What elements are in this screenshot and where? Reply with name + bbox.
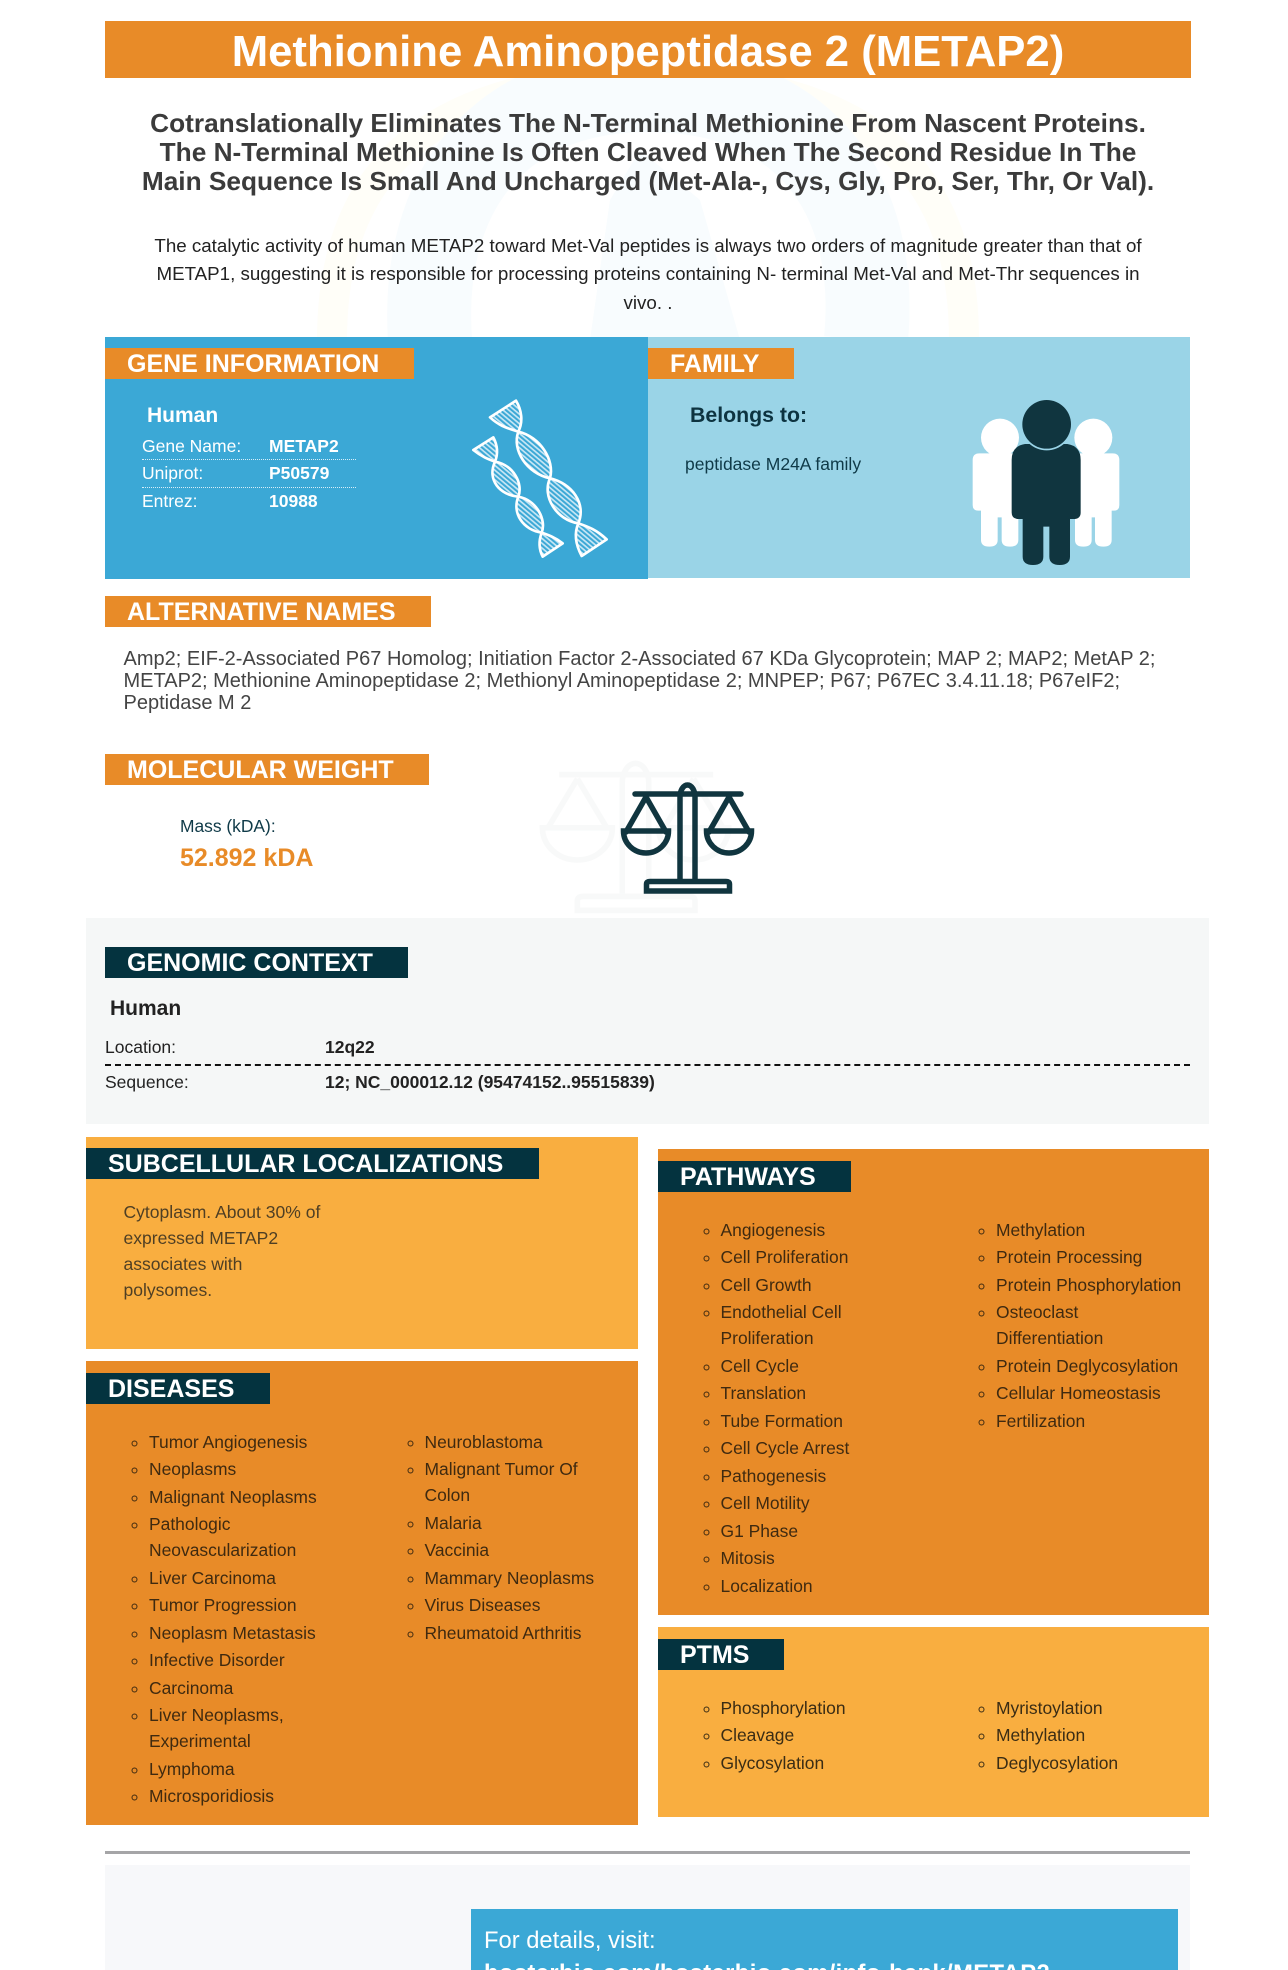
diseases list column 2: Mammary Neoplasms [424, 1568, 594, 1588]
panel: footer [105, 1865, 1190, 1970]
pathways list column 1: Cell Growth [720, 1274, 812, 1294]
panel: gene information [105, 337, 648, 579]
callout: details link: For details, visit: [484, 1926, 656, 1954]
pathways list column 1: Proliferation [720, 1328, 814, 1348]
ptms list column 2: Methylation [996, 1725, 1085, 1745]
entrez row [142, 490, 318, 510]
panel: genomic context: 12; NC_000012.12 (95474152..95515839) [325, 1072, 655, 1092]
panel: diseases [86, 1361, 638, 1825]
diseases list column 2 [408, 1432, 594, 1642]
subtitle: The N-Terminal Methionine Is Often Cleaved When The Second Residue In The [160, 137, 1136, 167]
uniprot row: P50579 [269, 463, 329, 483]
heading: pathways: PATHWAYS [680, 1162, 816, 1190]
alternative names text: Amp2; EIF-2-Associated P67 Homolog; Initiation Factor 2-Associated 67 KDa Glycoprotein; MAP 2; MAP2; MetAP 2; [124, 648, 1155, 670]
diseases list column 1: Experimental [149, 1731, 251, 1751]
uniprot row: Uniprot: [142, 463, 203, 483]
pathways list column 1: Pathogenesis [720, 1466, 826, 1486]
heading: diseases: DISEASES [108, 1375, 234, 1403]
entrez row: 10988 [269, 490, 318, 510]
pathways list column 2: Differentiation [996, 1328, 1103, 1348]
title [105, 21, 1191, 78]
pathways list column 2: Protein Phosphorylation [996, 1274, 1181, 1294]
species label: Human [110, 997, 181, 1020]
localization text: expressed METAP2 [124, 1228, 278, 1248]
localization text: polysomes. [124, 1280, 212, 1300]
gene name row [142, 436, 356, 460]
localization text: Cytoplasm. About 30% of [124, 1202, 320, 1222]
heading: diseases [86, 1373, 270, 1404]
subtitle: Cotranslationally Eliminates The N-Terminal Methionine From Nascent Proteins. [150, 108, 1146, 138]
pathways list column 2: Osteoclast [996, 1302, 1078, 1322]
pathways list column 2 [978, 1220, 1181, 1430]
diseases list column 1: Liver Carcinoma [149, 1568, 276, 1588]
heading: subcellular localizations: SUBCELLULAR LOCALIZATIONS [108, 1150, 503, 1178]
diseases list column 1: Lymphoma [149, 1758, 235, 1778]
ptms list column 1: Phosphorylation [720, 1698, 846, 1718]
diseases list column 1: Neoplasm Metastasis [149, 1622, 316, 1642]
pathways list column 1: Cell Motility [720, 1493, 810, 1513]
description [154, 234, 1142, 312]
diseases list column 2: Neuroblastoma [424, 1432, 543, 1452]
heading: molecular weight: MOLECULAR WEIGHT [127, 756, 394, 784]
heading: family: FAMILY [670, 350, 759, 378]
title: Methionine Aminopeptidase 2 (METAP2) [232, 27, 1064, 76]
species label: Human [147, 404, 218, 427]
panel: ptms [658, 1627, 1209, 1817]
diseases list column 1: Neoplasms [149, 1459, 236, 1479]
pathways list column 1: Cell Proliferation [720, 1247, 848, 1267]
belongs to label: Belongs to: [690, 403, 807, 427]
diseases list column 1: Tumor Progression [149, 1595, 297, 1615]
pathways list column 2: Methylation [996, 1220, 1085, 1240]
heading: pathways [658, 1160, 851, 1192]
sequence row: Sequence: [105, 1072, 189, 1092]
diseases list column 2: Colon [424, 1485, 470, 1505]
mass value: 52.892 kDA [180, 844, 313, 872]
heading: gene information: GENE INFORMATION [127, 350, 379, 378]
description: METAP1, suggesting it is responsible for processing proteins containing N- terminal Met-Val and Met-Thr sequences in [156, 263, 1140, 284]
diseases list column 2: Malaria [424, 1512, 482, 1532]
subtitle: Main Sequence Is Small And Uncharged (Met-Ala-, Cys, Gly, Pro, Ser, Thr, Or Val). [142, 166, 1154, 196]
sequence row [105, 1072, 655, 1092]
diseases list column 1: Pathologic [149, 1514, 230, 1534]
diseases list column 1: Infective Disorder [149, 1650, 285, 1670]
location row: Location: [105, 1037, 176, 1057]
pathways list column 1: G1 Phase [720, 1520, 798, 1540]
diseases list column 2: Virus Diseases [424, 1595, 540, 1615]
diseases list column 1: Tumor Angiogenesis [149, 1432, 307, 1452]
background logo watermark [0, 0, 1288, 340]
heading: ptms: PTMS [680, 1641, 749, 1669]
heading: alternative names: ALTERNATIVE NAMES [127, 598, 396, 626]
location row [105, 1037, 375, 1057]
icon: people group [972, 400, 1120, 565]
gene name row: METAP2 [269, 436, 339, 456]
pathways list column 2: Cellular Homeostasis [996, 1383, 1161, 1403]
callout: details link [471, 1909, 1178, 1970]
ptms list column 1: Cleavage [720, 1725, 794, 1745]
ptms list column 2 [978, 1698, 1118, 1772]
subtitle [142, 108, 1154, 196]
pathways list column 1: Tube Formation [720, 1410, 843, 1430]
heading: ptms [658, 1639, 784, 1670]
diseases list column 1: Neovascularization [149, 1540, 296, 1560]
panel: subcellular localizations [86, 1137, 638, 1349]
pathways list column 1: Localization [720, 1576, 813, 1596]
panel: genomic context [86, 918, 1209, 1124]
pathways list column 1: Mitosis [720, 1548, 775, 1568]
panel: family [648, 337, 1190, 578]
localization text: associates with [124, 1254, 242, 1274]
alternative names text: METAP2; Methionine Aminopeptidase 2; Methionyl Aminopeptidase 2; MNPEP; P67; P67EC 3.4.11.18; P67eIF2; [124, 670, 1120, 692]
pathways list column 2: Protein Processing [996, 1247, 1142, 1267]
heading: family [648, 348, 794, 379]
uniprot row [142, 463, 356, 488]
ptms list column 1 [704, 1698, 846, 1772]
diseases list column 1: Microsporidiosis [149, 1786, 274, 1806]
pathways list column 1: Angiogenesis [720, 1220, 825, 1240]
panel: pathways [658, 1149, 1209, 1615]
heading: genomic context: GENOMIC CONTEXT [127, 949, 373, 977]
pathways list column 2: Fertilization [996, 1410, 1085, 1430]
gene name row: Gene Name: [142, 436, 241, 456]
panel: genomic context: 12q22 [325, 1037, 375, 1057]
description: The catalytic activity of human METAP2 toward Met-Val peptides is always two orders of magnitude greater than that of [154, 234, 1142, 256]
pathways list column 1: Translation [720, 1383, 806, 1403]
ptms list column 1: Glycosylation [720, 1752, 824, 1772]
diseases list column 2: Vaccinia [424, 1540, 489, 1560]
diseases list column 1: Carcinoma [149, 1678, 233, 1698]
pathways list column 2: Protein Deglycosylation [996, 1356, 1178, 1376]
pathways list column 1: Cell Cycle Arrest [720, 1438, 849, 1458]
description: vivo. . [624, 292, 672, 312]
diseases list column 2: Rheumatoid Arthritis [424, 1622, 582, 1642]
mass label: Mass (kDA): [180, 816, 276, 836]
alternative names text [124, 648, 1155, 714]
entrez row: Entrez: [142, 490, 197, 510]
pathways list column 1 [704, 1220, 850, 1596]
alternative names text: Peptidase M 2 [124, 692, 251, 714]
diseases list column 1: Malignant Neoplasms [149, 1486, 317, 1506]
diseases list column 1: Liver Neoplasms, [149, 1705, 284, 1725]
icon: dna helices [472, 399, 608, 558]
localization text [124, 1202, 320, 1300]
icon: balance scale [620, 782, 754, 894]
family name: peptidase M24A family [685, 454, 861, 474]
diseases list column 1 [132, 1432, 317, 1806]
dashed divider [105, 1064, 1190, 1066]
pathways list column 1: Cell Cycle [720, 1356, 799, 1376]
ptms list column 2: Deglycosylation [996, 1752, 1118, 1772]
ptms list column 2: Myristoylation [996, 1698, 1103, 1718]
diseases list column 2: Malignant Tumor Of [424, 1459, 578, 1479]
pathways list column 1: Endothelial Cell [720, 1302, 842, 1322]
